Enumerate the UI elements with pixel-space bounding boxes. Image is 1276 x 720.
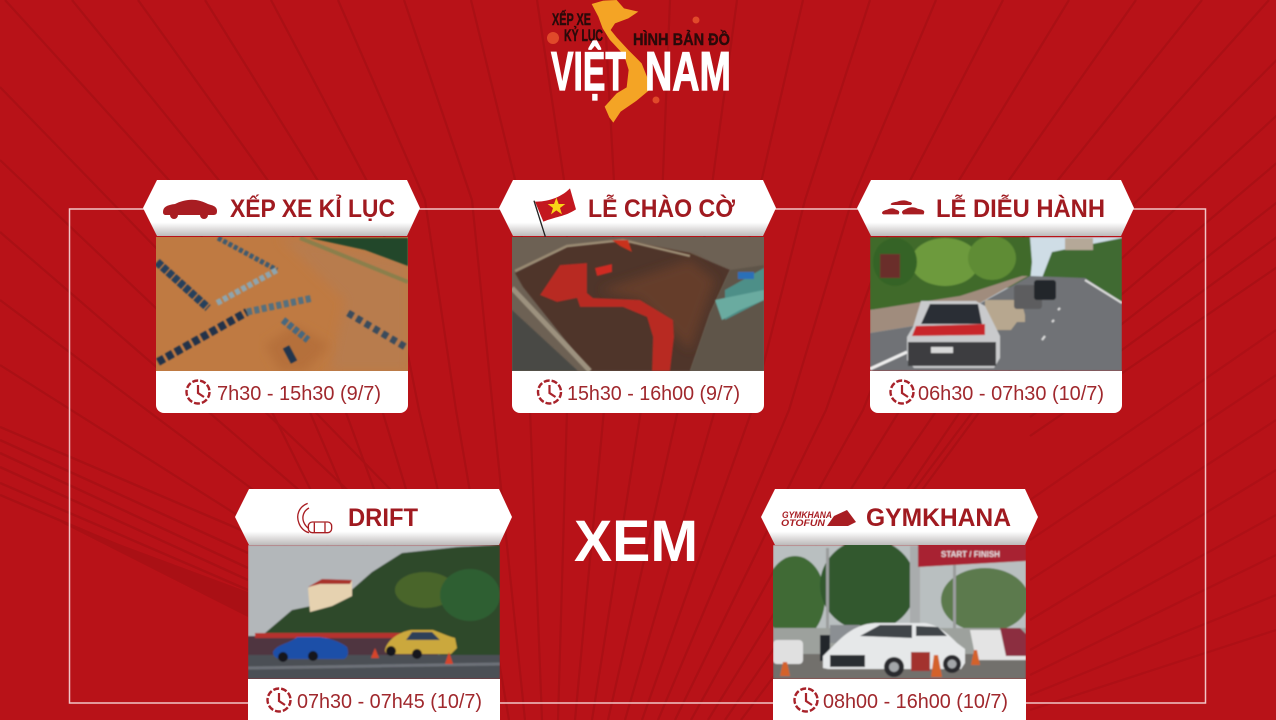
central label: xem: XEM	[574, 509, 698, 574]
time: 07h30 - 07h45 (10/7)	[297, 691, 482, 713]
blossom flowers	[547, 16, 700, 104]
time bar	[248, 679, 500, 720]
time: 08h00 - 16h00 (10/7)	[823, 691, 1008, 713]
icon: three cars	[882, 200, 924, 214]
card: xếp xe kỉ lục	[143, 180, 420, 413]
banner	[857, 180, 1134, 236]
photo: drifting cars	[248, 545, 500, 679]
logo text: việt: VIỆT	[551, 40, 626, 102]
icon: clock	[268, 688, 290, 712]
card: gymkhana	[761, 489, 1038, 720]
photo: parade on a road	[870, 236, 1122, 371]
card: lễ diễu hành	[857, 180, 1134, 413]
banner	[235, 489, 512, 545]
frame connecting the activity cards	[70, 209, 1206, 703]
photo: cars on dirt field	[156, 237, 408, 371]
time: 06h30 - 07h30 (10/7)	[918, 383, 1104, 405]
time bar	[156, 371, 408, 413]
time bar	[870, 371, 1122, 413]
card: drift	[235, 489, 512, 720]
icon: clock	[186, 380, 210, 404]
logo: Xếp xe kỷ lục hình bản đồ Việt Nam	[547, 0, 731, 123]
icon: clock	[890, 380, 914, 404]
icon: red car	[163, 200, 217, 219]
heading: LỄ CHÀO CỜ	[588, 193, 736, 223]
logo text: hình bản đồ: HÌNH BẢN ĐỒ	[633, 30, 730, 49]
photo: aerial red map of Vietnam	[512, 237, 764, 371]
icon: clock	[538, 380, 561, 404]
logo text: nam: NAM	[645, 40, 731, 102]
icon: gymkhana otofun logo: OTOFUN	[781, 518, 826, 528]
time bar	[773, 679, 1026, 720]
heading: XẾP XE KỈ LỤC	[230, 193, 395, 223]
time: 7h30 - 15h30 (9/7)	[217, 383, 381, 405]
banner	[143, 180, 420, 236]
photo: white car on track	[765, 539, 1029, 679]
icon: Vietnamese flag	[534, 188, 576, 237]
heading: DRIFT	[348, 504, 418, 532]
banner	[499, 180, 776, 236]
icon: gymkhana otofun logo	[781, 510, 856, 528]
icon: gymkhana otofun logo: GYMKHANA	[782, 510, 832, 520]
icon: clock	[794, 688, 818, 712]
logo text: kỷ lục: KỶ LỤC	[564, 26, 603, 45]
time: 15h30 - 16h00 (9/7)	[567, 383, 740, 405]
logo text: xếp xe: XẾP XE	[552, 10, 591, 29]
time bar	[512, 371, 764, 413]
heading: LỄ DIỄU HÀNH	[936, 193, 1105, 223]
photo: white car on track: START / FINISH	[941, 550, 1000, 559]
banner	[761, 489, 1038, 545]
icon: drifting car	[298, 503, 332, 533]
card: lễ chào cờ	[499, 180, 776, 413]
map of Vietnam	[592, 0, 649, 123]
heading: GYMKHANA	[866, 504, 1011, 532]
